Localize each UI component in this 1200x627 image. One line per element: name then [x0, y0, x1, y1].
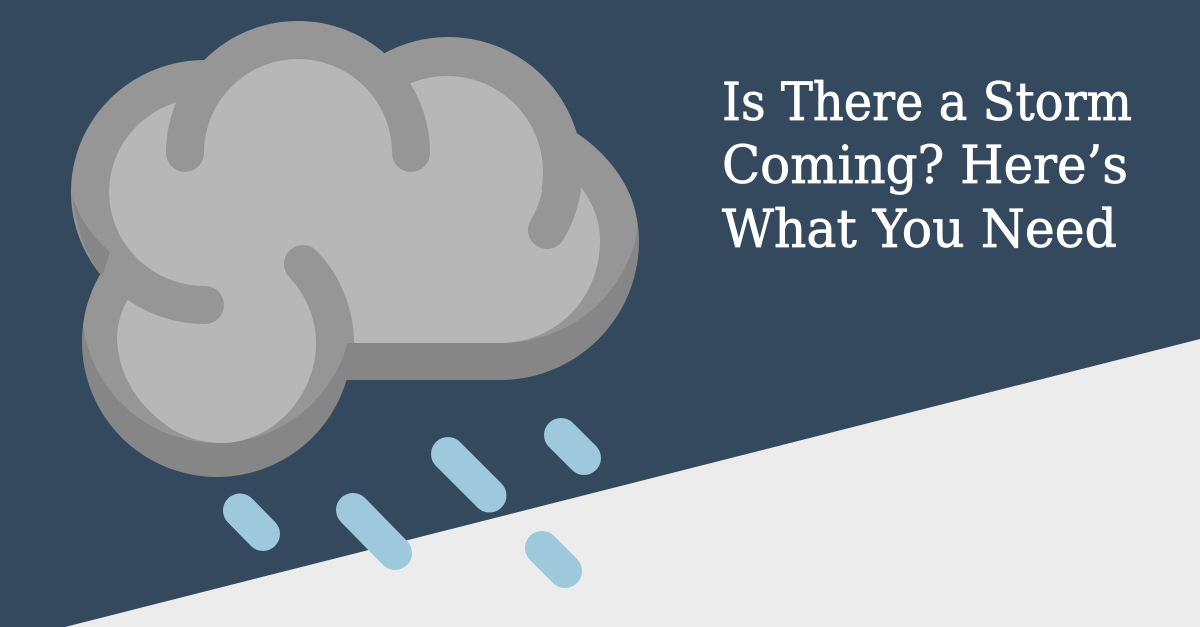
cloud left shadow wedge	[72, 195, 110, 277]
light diagonal ground panel	[65, 339, 1200, 627]
icon: rain drops	[240, 435, 584, 571]
icon: storm cloud	[72, 40, 639, 477]
cloud mid-tone body	[82, 40, 637, 443]
cloud light interior	[109, 58, 600, 443]
cloud outline strokes	[90, 40, 563, 343]
title	[722, 73, 1132, 260]
cloud shadow silhouette	[82, 132, 639, 477]
title: What You Need	[722, 200, 1117, 260]
title: Is There a Storm	[722, 73, 1132, 133]
title: Coming? Here’s	[722, 136, 1128, 196]
